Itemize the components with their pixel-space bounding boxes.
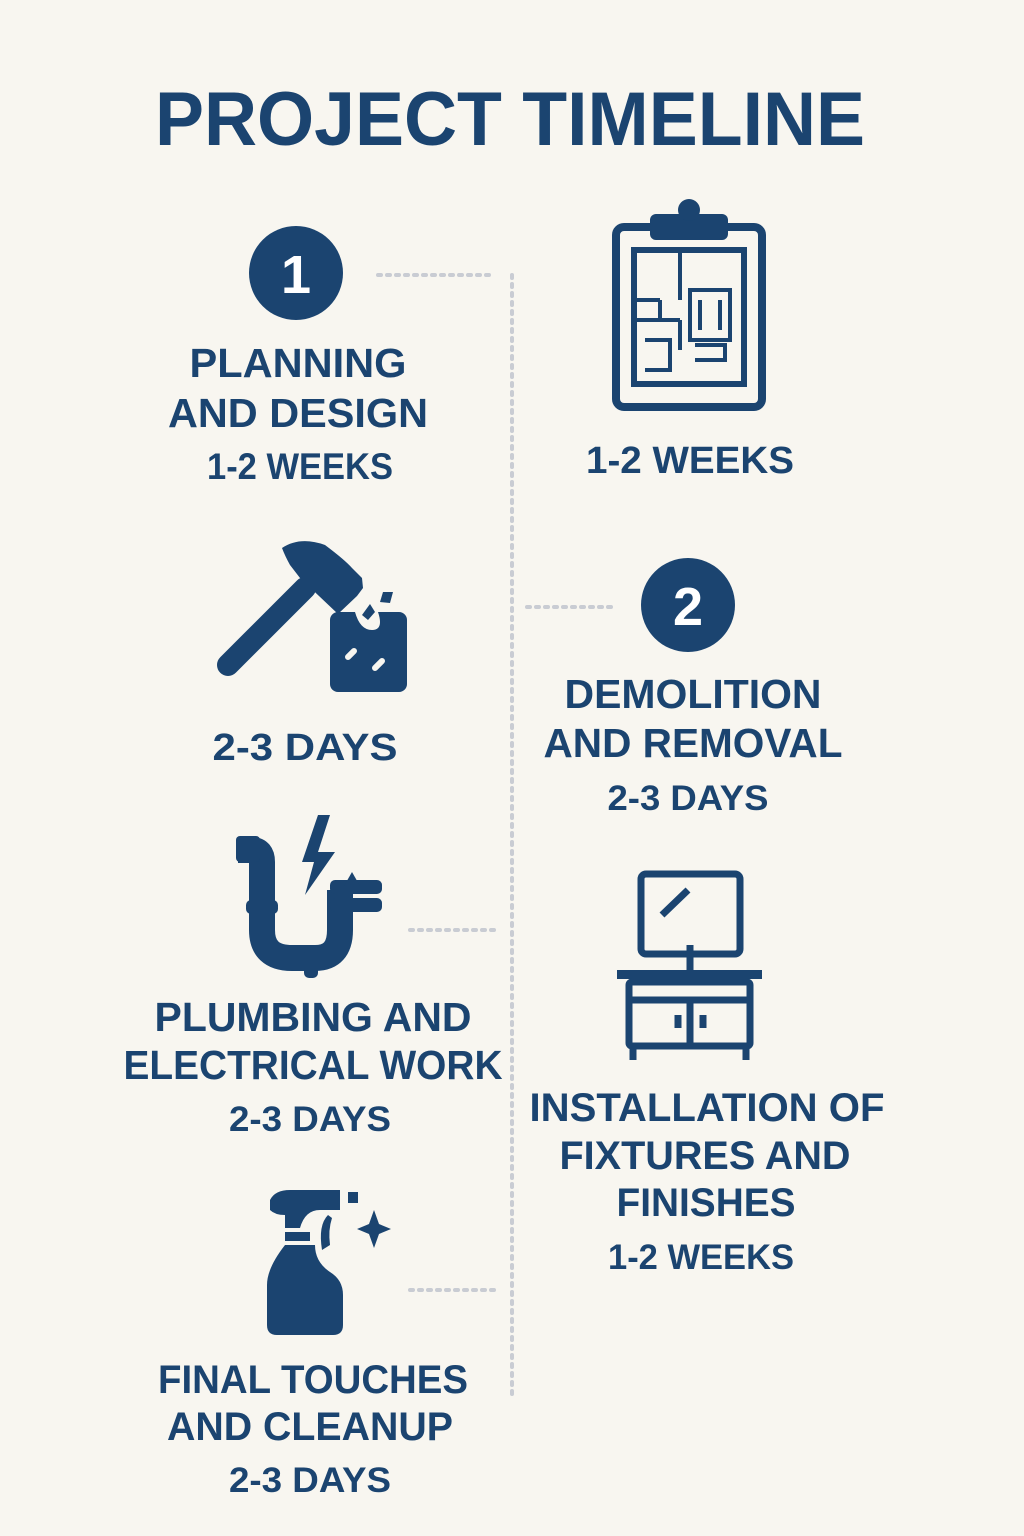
step 2: demolition and removal xyxy=(544,558,842,818)
step 3: plumbing and electrical xyxy=(124,994,503,1139)
heading: planning and design xyxy=(168,340,428,436)
heading: planning and design: AND DESIGN xyxy=(168,390,428,436)
number badge 2 xyxy=(641,558,735,652)
icon: clipboard floor plan xyxy=(616,199,762,407)
heading: plumbing and electrical work: PLUMBING AND xyxy=(154,994,472,1040)
heading: demolition and removal: DEMOLITION xyxy=(564,671,822,717)
number badge 1: 1 xyxy=(281,245,311,305)
icon: vanity xyxy=(617,874,762,1060)
heading: planning and design: PLANNING xyxy=(190,340,406,386)
heading: installation of fixtures and finishes: FIXTURES AND xyxy=(560,1134,850,1178)
heading: demolition and removal: AND REMOVAL xyxy=(544,720,842,766)
number badge 2: 2 xyxy=(673,577,703,637)
icon: spray bottle xyxy=(267,1190,391,1335)
icon: pipe with lightning xyxy=(236,815,382,978)
heading: plumbing and electrical work xyxy=(124,994,503,1088)
heading: final touches and cleanup: FINAL TOUCHES xyxy=(158,1358,468,1402)
duration: 2-3 DAYS xyxy=(229,1100,391,1139)
heading: final touches and cleanup xyxy=(158,1358,468,1449)
heading: demolition and removal xyxy=(544,671,842,766)
duration right 1: 1-2 WEEKS xyxy=(586,440,794,482)
heading: plumbing and electrical work: ELECTRICAL WORK xyxy=(124,1042,503,1088)
duration: 2-3 DAYS xyxy=(229,1461,391,1500)
step 5: final touches xyxy=(158,1358,468,1500)
step 4: installation xyxy=(530,1086,884,1277)
duration left 2: 2-3 DAYS xyxy=(212,727,398,769)
title: PROJECT TIMELINE xyxy=(155,77,865,162)
heading: installation of fixtures and finishes: INSTALLATION OF xyxy=(530,1086,884,1130)
icon: hammer xyxy=(228,541,407,692)
step 1: planning and design xyxy=(168,226,428,487)
heading: installation of fixtures and finishes: FINISHES xyxy=(616,1181,796,1225)
duration: 1-2 WEEKS xyxy=(207,446,393,487)
heading: installation of fixtures and finishes xyxy=(530,1086,884,1225)
heading: final touches and cleanup: AND CLEANUP xyxy=(167,1405,453,1449)
duration: 2-3 DAYS xyxy=(608,779,768,818)
duration: 1-2 WEEKS xyxy=(608,1238,794,1277)
number badge 1 xyxy=(249,226,343,320)
